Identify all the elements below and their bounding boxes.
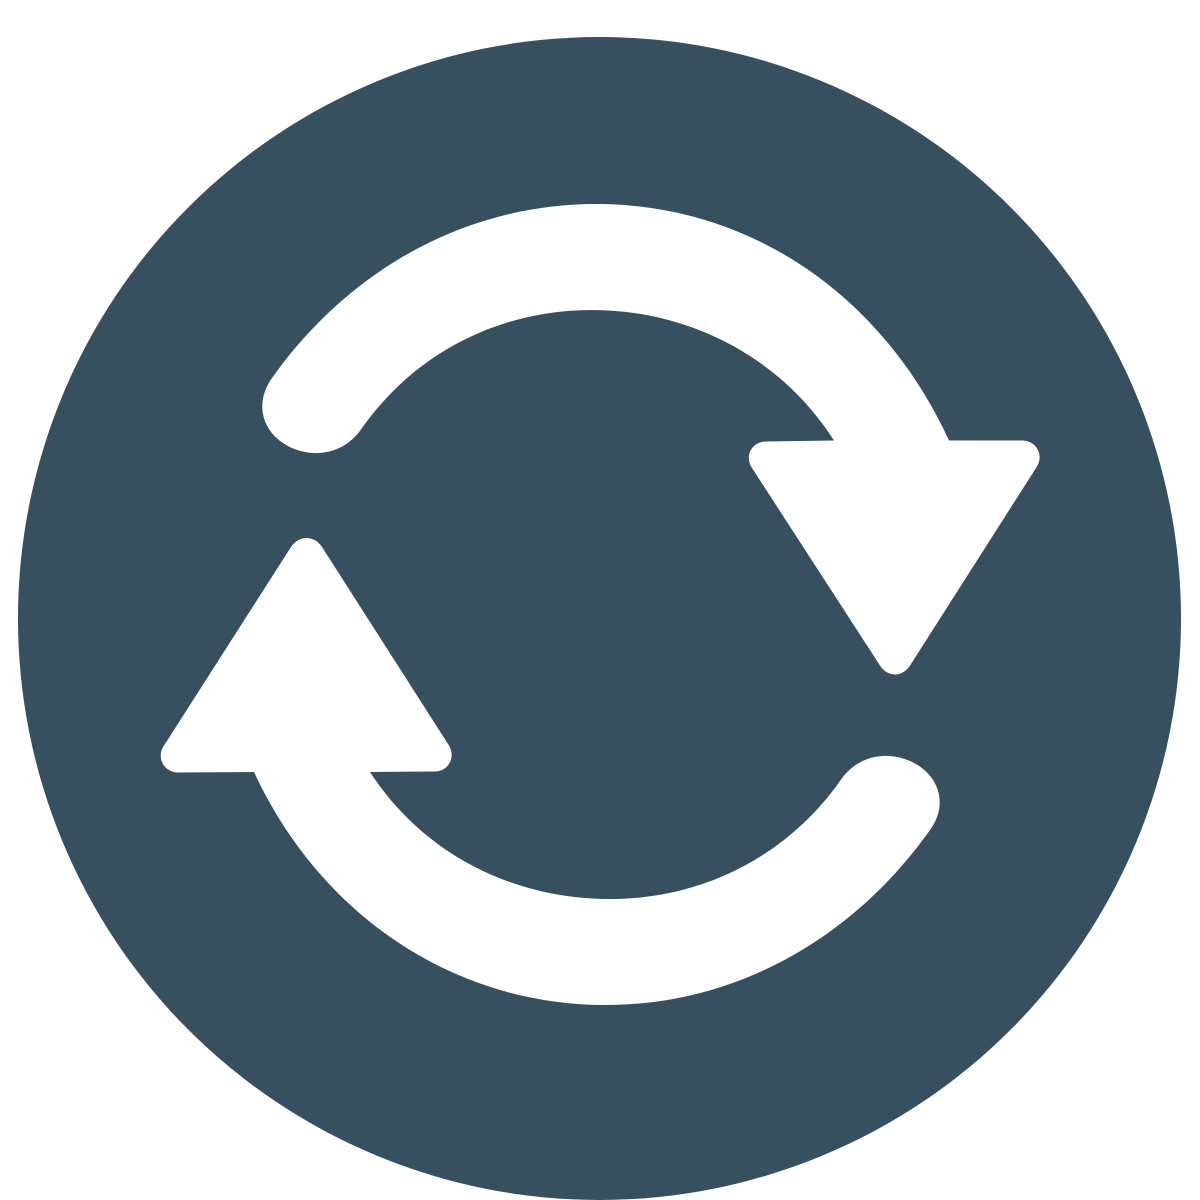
arrow: bottom clockwise (161, 538, 940, 1005)
arrow: top clockwise (262, 204, 1040, 674)
